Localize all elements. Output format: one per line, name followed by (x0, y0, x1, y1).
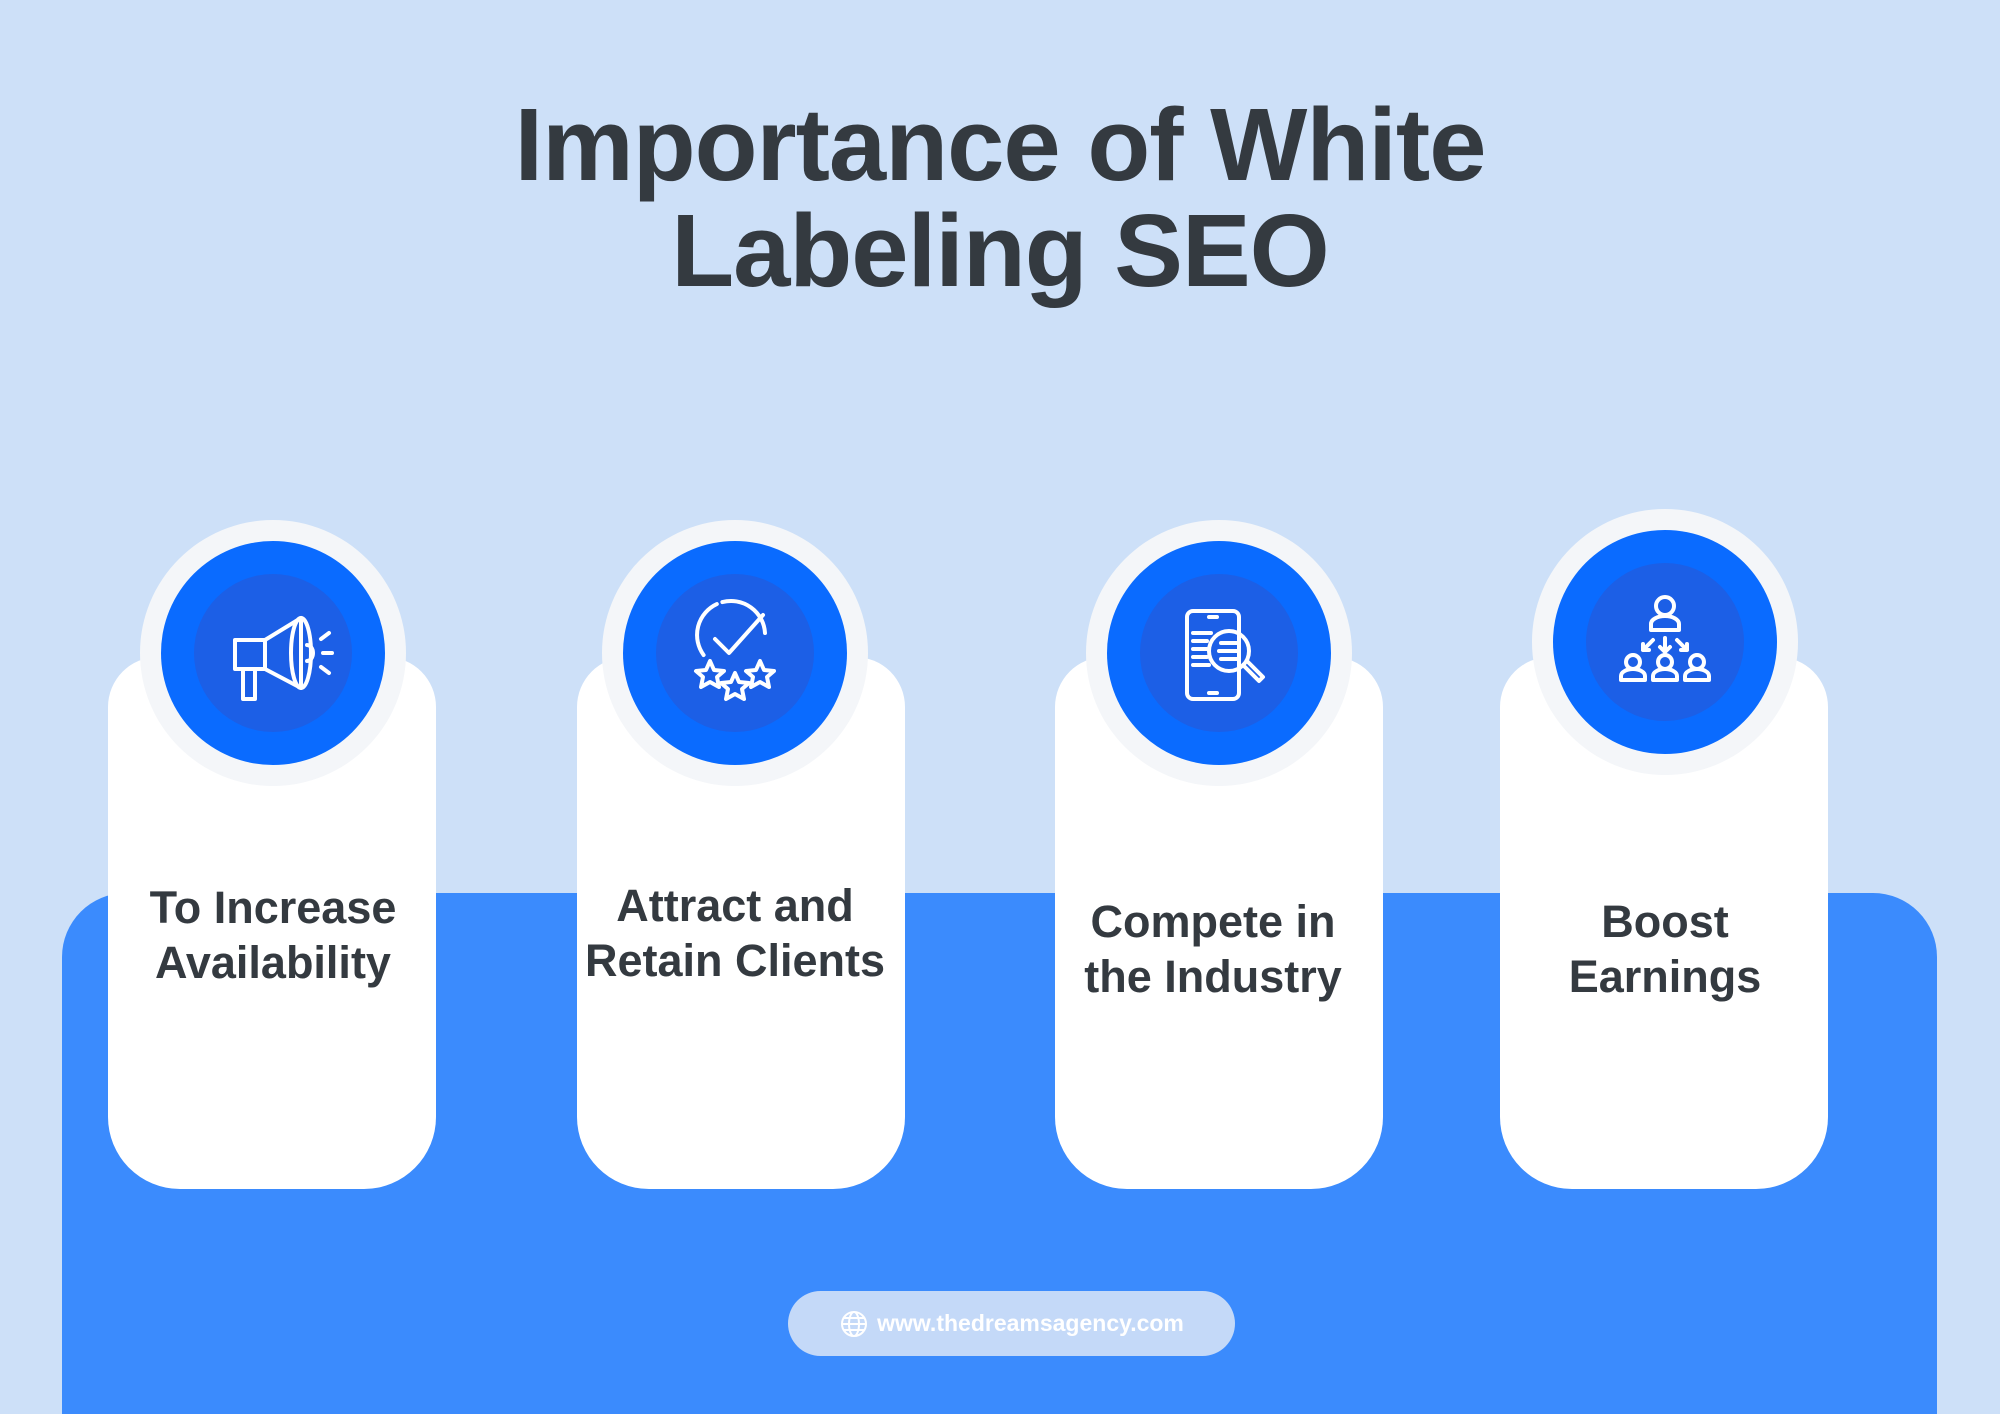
label 2: Retain Clients (585, 935, 885, 986)
icon: check with stars (602, 520, 868, 786)
label 1 (150, 882, 396, 988)
label 4: Boost (1601, 896, 1729, 947)
icon: document search (1086, 520, 1352, 786)
title: Importance of White (515, 87, 1485, 202)
footer: website pill: www.thedreamsagency.com (877, 1310, 1184, 1336)
card 4 (1500, 657, 1828, 1189)
title (515, 87, 1485, 308)
label 3: Compete in (1090, 896, 1336, 947)
label 4: Earnings (1569, 951, 1761, 1002)
label 2 (585, 880, 885, 986)
label 1: To Increase (150, 882, 396, 933)
label 4 (1569, 896, 1761, 1002)
label 2: Attract and (616, 880, 854, 931)
footer: website pill (788, 1291, 1235, 1356)
icon: team hierarchy (1532, 509, 1798, 775)
label 3 (1084, 896, 1342, 1002)
label 1: Availability (155, 937, 391, 988)
panel: blue base (62, 893, 1937, 1414)
icon: megaphone (140, 520, 406, 786)
card 2 (577, 657, 905, 1189)
label 3: the Industry (1084, 951, 1342, 1002)
card 1 (108, 657, 436, 1189)
card 3 (1055, 657, 1383, 1189)
title: Labeling SEO (671, 193, 1329, 308)
